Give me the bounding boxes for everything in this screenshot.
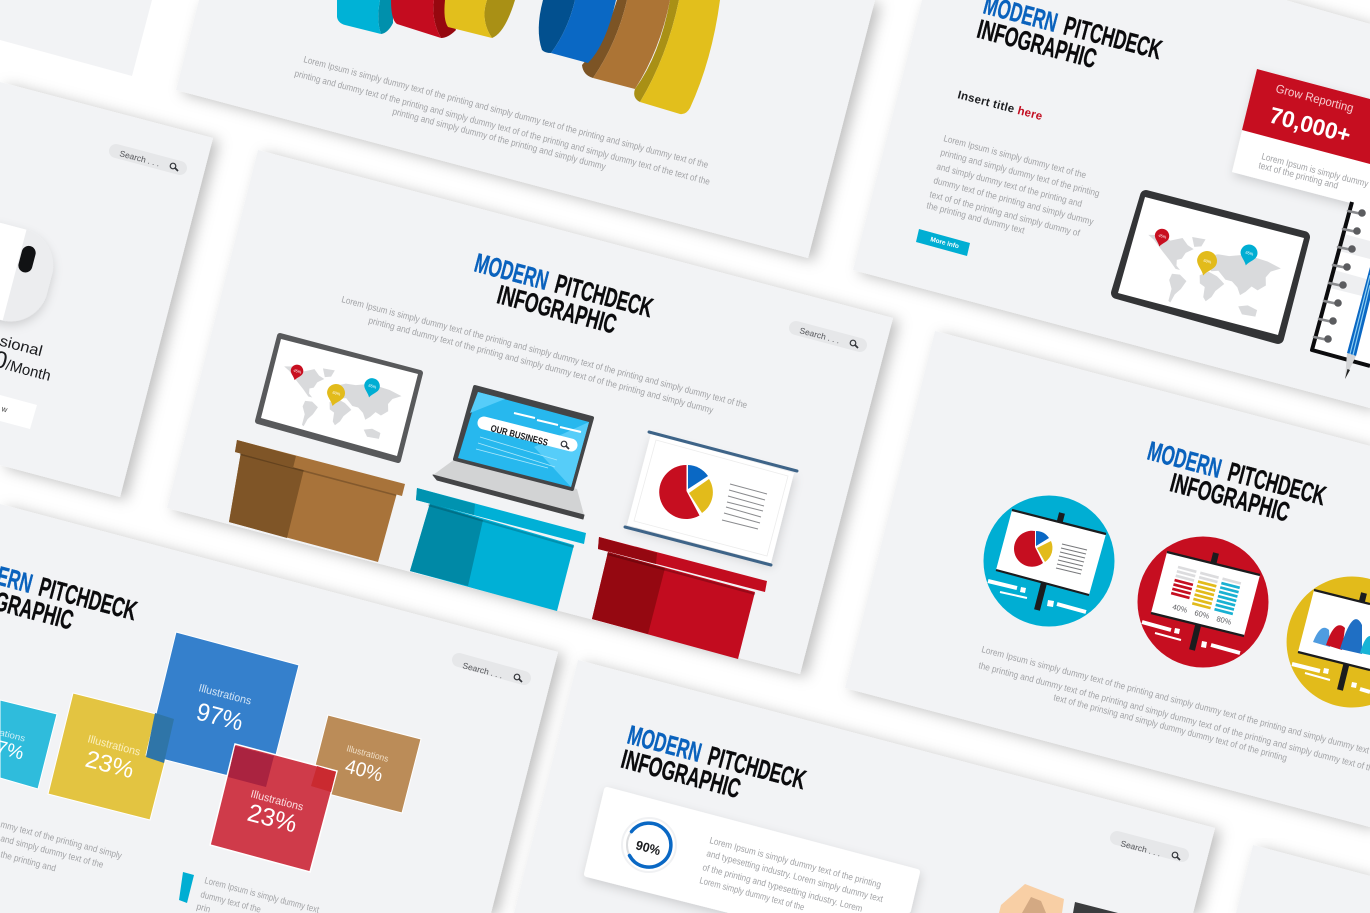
slide background [514,660,1215,913]
search pill: Search . . . [461,660,504,680]
square: brown 40%: 40% [343,756,385,787]
title: PITCHDECK [36,572,140,626]
search pill: Search . . . [118,148,161,168]
square: red 23%: Illustrations [249,788,305,814]
square: brown 40% [309,715,421,813]
square: brown 40%: Illustrations [345,743,390,764]
title: MODERN [624,720,705,768]
slide: presentation over world map, laptop and board [167,150,893,674]
body text left: and simply dummy text of the [0,833,105,870]
body text left: mmy text of the printing and simply [0,819,123,861]
hand holding device [999,884,1118,913]
body text: printing and dummy text of the printing and simply dummy text of of the printing and simply dummy text of the text of the [293,68,711,187]
laptop [433,387,592,519]
slide: professional pricing [0,82,213,497]
body text: printing and simply dummy of the printing and simply dummy [391,106,607,172]
tablet with world map: 45% [1158,233,1167,240]
card: grow reporting: text of the printing and [1257,160,1339,191]
presentation board with pie chart [625,432,797,565]
title: INFOGRAPHIC [618,744,744,804]
title: PITCHDECK [1061,11,1165,65]
button: w [0,404,9,414]
red circle with bar board: 80% [1215,614,1233,627]
body text left: the printing and [0,849,57,873]
slide: cylinders [176,0,875,258]
body text: the printing and dummy text [925,200,1026,236]
card text: Lorem Ipsum is simply dummy text of the printing [708,835,882,890]
title [1138,436,1329,536]
cyan pedestal [410,488,586,611]
monitor with world map: 45% [293,368,302,375]
title: MODERN [1144,436,1225,484]
title: INFOGRAPHIC [974,14,1100,74]
square: red 23% [210,744,337,872]
body text: printing and dummy text of the printing and simply dummy text of of the printing and simply dummy [367,315,715,415]
subtitle: Insert title here [956,89,1043,123]
search pill: Search . . . [798,325,841,345]
body text: Lorem Ipsum is simply dummy text of the printing and simply dummy text of the printing and simply dummy text of the [340,294,748,410]
red pedestal [592,537,767,659]
square: red 23%: 23% [244,799,300,838]
tablet with world map: 60% [1203,258,1212,265]
notebook with pencil [1312,202,1370,379]
accent bar [179,872,194,903]
title: INFOGRAPHIC [494,280,620,340]
tablet with world map [1117,196,1304,338]
button: more info [916,229,970,256]
body text: Lorem Ipsum is simply dummy text of the printing and simply dummy text of the printing and simply dummy text of the [302,54,709,170]
square: teal 97% [0,700,57,789]
slide background [0,82,213,497]
button [0,395,37,429]
red circle with bar board: 40% [1171,602,1189,615]
icon: mouse [0,223,56,328]
slide background [845,331,1370,827]
slide: insert title with tablet and notebook [853,0,1370,408]
slide background [176,0,875,258]
square: yellow 23%: 23% [82,746,137,784]
slide background [853,0,1370,408]
red circle with bar board: 60% [1193,608,1211,621]
search pill: Search . . . [1119,838,1162,858]
slide: three presentation circles [845,331,1370,827]
card: grow reporting [1232,69,1370,208]
title: MODERN [471,248,552,296]
square: blue 97% [146,632,299,786]
body text: dummy text of the printing and simply dummy [932,175,1095,227]
tablet with world map: 65% [1245,250,1254,257]
slide: progress card [514,660,1215,913]
progress ring 90% [622,818,676,872]
laptop: OUR BUSINESS [489,423,549,449]
square: blue 97%: 97% [193,698,246,737]
monitor with world map [258,336,420,460]
title: PITCHDECK [552,269,656,323]
card text: and typesetting industry. Lorem simply dummy text [705,848,884,904]
card with progress ring [587,790,917,913]
slide background [0,504,558,913]
progress ring 90%: 90% [634,837,663,858]
body text: text of the prinsing and simply dummy dummy text of of the printing [1052,692,1288,763]
red circle with bar board [1138,536,1268,668]
slide: illustration squares [0,504,558,913]
title: INFOGRAPHIC [1167,468,1293,528]
body text: Lorem Ipsum is simply dummy text of the [942,133,1087,180]
search pill [1117,838,1182,860]
brown pedestal [229,440,405,562]
search pill [796,325,860,348]
body text: and simply dummy text of the printing and [935,161,1083,209]
monitor with world map: 60% [332,390,341,397]
slide: bottom right fragment [1236,845,1370,913]
slide background [167,150,893,674]
square: blue 97%: Illustrations [197,682,253,708]
title: PITCHDECK [705,741,809,795]
card: grow reporting: Grow Reporting [1274,81,1355,115]
chart: 3D cylinders [337,0,720,114]
slide: top left fragment [0,0,152,76]
search pill [116,148,180,171]
square: yellow 23%: Illustrations [86,733,142,759]
card text [698,835,884,913]
square: yellow 23% [48,693,176,820]
teal circle with pie board [984,496,1114,626]
body text: text of of the printing and simply dummy of [928,189,1081,238]
yellow circle with mountain board [1287,576,1370,708]
body text [925,133,1101,238]
search pill [459,660,524,682]
button: more info: More info [929,236,960,250]
monitor with world map: 65% [368,383,377,390]
card: grow reporting: 70,000+ [1267,102,1354,148]
title [465,248,656,348]
body text: printing and simply dummy text of the printing [939,147,1101,199]
